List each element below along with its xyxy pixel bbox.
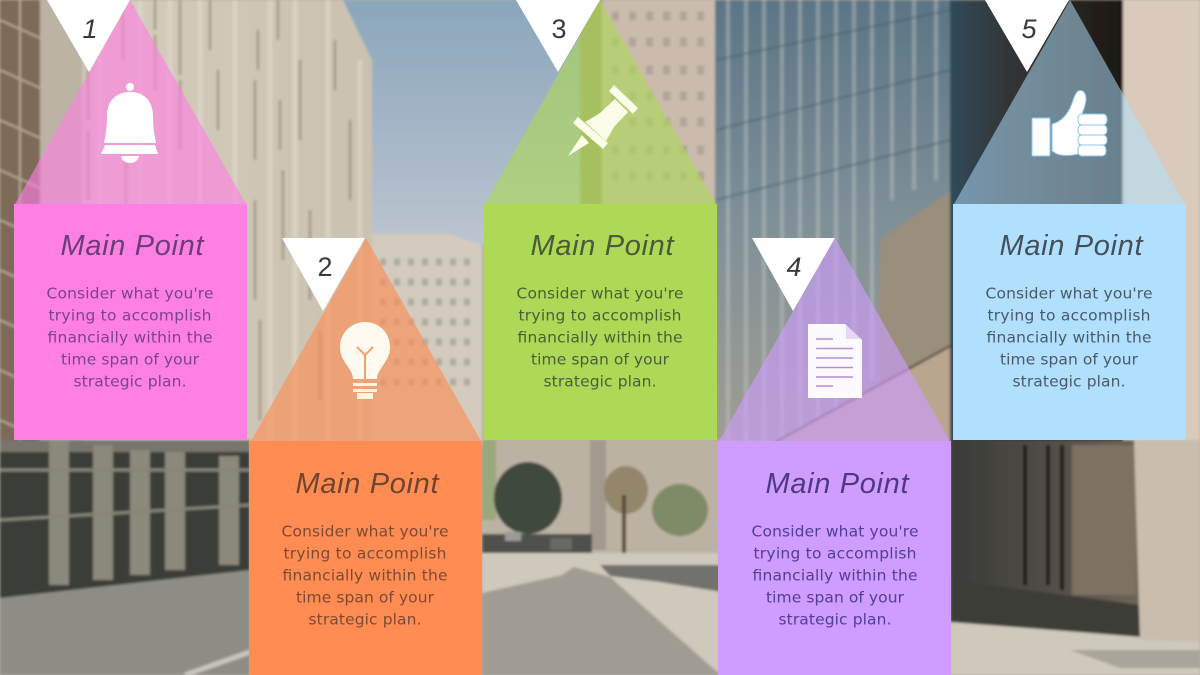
body text <box>986 284 1152 390</box>
white number badge 2 <box>282 238 365 311</box>
panel 5: blue main point <box>953 0 1186 440</box>
panel 3: green main point <box>484 0 717 440</box>
number 1: 1 <box>82 14 98 44</box>
body text: strategic plan. <box>74 372 186 390</box>
pink text card <box>14 204 247 440</box>
body text: Consider what you're <box>752 522 918 540</box>
orange translucent triangle <box>251 238 481 441</box>
body text: time span of your <box>766 588 905 606</box>
body text <box>282 522 448 628</box>
body text: time span of your <box>296 588 435 606</box>
blue text card <box>953 204 1186 440</box>
green translucent triangle <box>485 0 716 204</box>
body text: Consider what you're <box>282 522 448 540</box>
body text: strategic plan. <box>544 372 656 390</box>
heading: Main Point <box>1000 230 1144 262</box>
body text: trying to accomplish <box>518 306 682 324</box>
body text: financially within the <box>282 566 448 584</box>
icon: push pin <box>568 85 638 156</box>
icon: light bulb <box>340 322 390 399</box>
icon: thumbs up <box>1032 90 1107 156</box>
body text: trying to accomplish <box>754 544 916 562</box>
body text: time span of your <box>1000 350 1139 368</box>
body text: time span of your <box>61 350 200 368</box>
number 5: 5 <box>1021 14 1037 44</box>
number 2: 2 <box>317 252 333 282</box>
body text: Consider what you're <box>986 284 1152 302</box>
body text <box>46 284 214 390</box>
body text: Consider what you're <box>516 284 684 302</box>
purple text card <box>718 441 951 675</box>
white number badge 5 <box>985 0 1069 72</box>
body text: financially within the <box>48 328 212 346</box>
body text: financially within the <box>752 566 918 584</box>
body text: Consider what you're <box>46 284 214 302</box>
heading: Main Point <box>60 230 205 262</box>
body text: strategic plan. <box>308 610 422 628</box>
body text: financially within the <box>986 328 1152 346</box>
panel 2: orange main point <box>249 238 482 675</box>
body text: strategic plan. <box>1012 372 1126 390</box>
heading: Main Point <box>296 468 440 500</box>
number 3: 3 <box>551 14 567 44</box>
body text: strategic plan. <box>778 610 892 628</box>
icon: bell <box>101 83 158 163</box>
body text: time span of your <box>531 350 670 368</box>
body text: financially within the <box>518 328 682 346</box>
white number badge 3 <box>516 0 600 72</box>
panel 4: purple main point <box>718 238 951 675</box>
white number badge 4 <box>752 238 835 311</box>
body text <box>516 284 684 390</box>
orange text card <box>249 441 482 675</box>
pink translucent triangle <box>15 0 246 204</box>
body text: trying to accomplish <box>284 544 446 562</box>
purple translucent triangle <box>719 238 950 441</box>
body text: trying to accomplish <box>988 306 1150 324</box>
heading: Main Point <box>530 230 675 262</box>
number 4: 4 <box>786 252 802 282</box>
body text: trying to accomplish <box>48 306 212 324</box>
white number badge 1 <box>47 0 130 72</box>
panel 1: pink main point <box>14 0 247 440</box>
body text <box>752 522 918 628</box>
blue translucent triangle <box>954 0 1185 204</box>
green text card <box>484 204 717 440</box>
heading: Main Point <box>766 468 910 500</box>
icon: document <box>808 324 862 398</box>
